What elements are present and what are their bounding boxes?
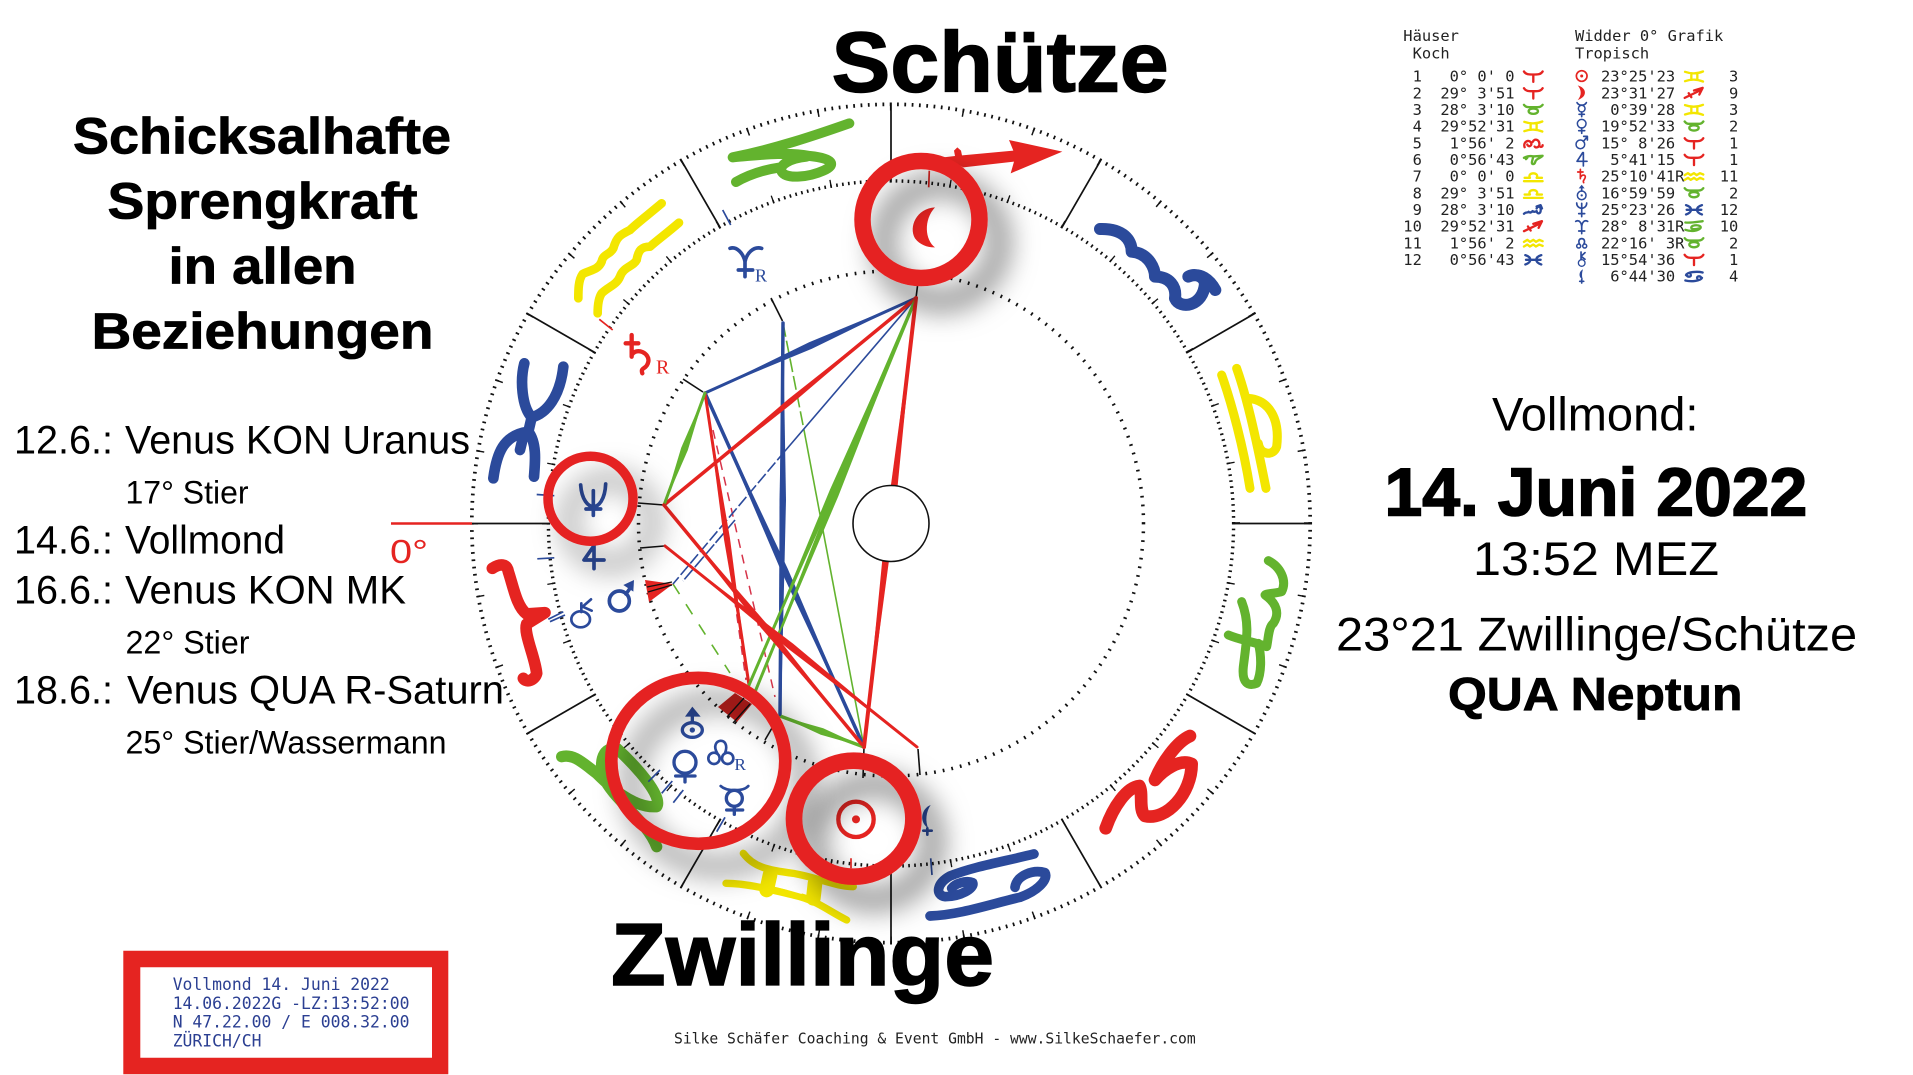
planet: venus <box>674 751 696 782</box>
heading: Zwillinge: Zwillinge <box>611 905 994 1004</box>
title block <box>73 107 451 359</box>
planet: uranus <box>682 707 702 737</box>
table: planets: 12 <box>1720 201 1738 219</box>
planet: pluto <box>730 248 767 286</box>
table: houses: 2 29° 3'51 <box>1403 84 1515 102</box>
highlight ring: moon <box>862 161 980 278</box>
table: houses: 5 1°56' 2 <box>1403 134 1515 152</box>
mars wedge <box>645 580 673 602</box>
planet: saturn <box>626 335 670 378</box>
degree scale rings <box>472 104 1310 943</box>
planet glyphs upper left <box>581 248 767 569</box>
table: houses: 6 0°56'43 <box>1403 151 1515 169</box>
transit date list: Venus QUA R-Saturn <box>127 668 504 712</box>
chart data box: 14.06.2022G -LZ:13:52:00 <box>173 994 410 1013</box>
title block: Schicksalhafte <box>73 107 451 164</box>
table: planets: 1 <box>1729 151 1738 169</box>
sagittarius arrow sign <box>943 140 1062 173</box>
zodiac: leo <box>1106 736 1192 828</box>
title block: Sprengkraft <box>108 172 418 229</box>
table: planets: 3 <box>1729 68 1738 86</box>
zodiac: capricorn <box>733 123 849 182</box>
table: planets: 2 <box>1729 184 1738 202</box>
table: planets: 1 <box>1729 251 1738 269</box>
transit date list: 25° Stier/Wassermann <box>126 724 446 760</box>
planet: saturn: R <box>656 356 670 378</box>
planet glyphs lower left <box>571 580 874 837</box>
thick aspects <box>664 298 917 747</box>
red dashed aspects <box>712 430 775 697</box>
transit date list: 22° Stier <box>126 624 250 660</box>
table: planets: 6°44'30 <box>1601 268 1675 286</box>
zero degree marker <box>390 524 472 570</box>
table: houses: 11 1°56' 2 <box>1403 234 1515 252</box>
table: planets: 22°16' 3R <box>1601 234 1685 252</box>
highlight ring: sun <box>794 761 913 877</box>
transit date list: 16.6.: <box>14 568 113 612</box>
table: houses: 7 0° 0' 0 <box>1403 168 1515 186</box>
green thin aspects <box>673 323 864 747</box>
table: planets: 23°31'27 <box>1601 84 1675 102</box>
zodiac: scorpio <box>1100 229 1215 305</box>
zodiac signs upper right <box>1100 229 1277 488</box>
planet: moon <box>913 207 935 247</box>
table: planets: 10 <box>1720 218 1738 236</box>
table: houses: Koch <box>1403 45 1450 63</box>
zodiac: gemini <box>726 853 853 920</box>
planet: jupiter <box>584 546 604 569</box>
planet: pluto: R <box>755 266 767 286</box>
transit date list: Venus KON MK <box>125 568 406 612</box>
table: planets: 5°41'15 <box>1601 151 1675 169</box>
transit date list: 17° Stier <box>126 474 249 510</box>
table: planets: 4 <box>1729 268 1738 286</box>
full moon details: 14. Juni 2022 <box>1384 455 1807 531</box>
table: planets: 19°52'33 <box>1601 118 1675 136</box>
zodiac: cancer <box>930 854 1046 916</box>
planet: mars <box>609 580 634 611</box>
planet: sun <box>838 802 874 837</box>
table: houses <box>1403 27 1543 269</box>
black connector stubs <box>638 286 920 778</box>
table: houses: 9 28° 3'10 <box>1403 201 1515 219</box>
chart data box: ZÜRICH/CH <box>173 1032 262 1051</box>
planet position ticks <box>537 171 932 875</box>
zodiac signs lower left <box>492 565 853 920</box>
table: planets: 25°10'41R <box>1601 168 1685 186</box>
table: planets: 0°39'28 <box>1601 101 1675 119</box>
zodiac: aries <box>492 565 545 681</box>
transit date list: 18.6.: <box>14 668 113 712</box>
zodiac: taurus <box>562 748 658 847</box>
highlight ring: venus group <box>611 678 785 844</box>
title block: Beziehungen <box>92 302 433 359</box>
table: planets: 15°54'36 <box>1601 251 1675 269</box>
chart data box: N 47.22.00 / E 008.32.00 <box>173 1013 410 1032</box>
highlight ring: neptune <box>548 456 633 541</box>
zodiac: aquarius <box>578 203 679 313</box>
center circle <box>853 486 929 562</box>
transit date list: Vollmond <box>125 518 285 562</box>
table: planets: 28° 8'31R <box>1601 218 1685 236</box>
astrological wheel <box>470 102 1312 944</box>
full moon details: 23°21 Zwillinge/Schütze <box>1336 608 1857 661</box>
full moon details: QUA Neptun <box>1448 668 1742 720</box>
table: houses: Häuser <box>1403 27 1459 45</box>
zodiac: virgo <box>1228 561 1284 684</box>
planet: mercury <box>721 786 748 814</box>
blue thin aspects <box>673 298 916 584</box>
footer credit: Silke Schäfer Coaching & Event GmbH - www.SilkeSchaefer.com <box>674 1030 1196 1047</box>
zero degree marker: 0° <box>390 533 428 570</box>
heading: Schütze: Schütze <box>832 16 1169 111</box>
planet: lunar node: R <box>734 755 746 774</box>
table: houses: 8 29° 3'51 <box>1403 184 1515 202</box>
planet: lunar node <box>708 741 746 774</box>
table: houses: 4 29°52'31 <box>1403 118 1515 136</box>
zodiac signs upper left <box>493 123 849 478</box>
table: planets: Tropisch <box>1575 45 1649 63</box>
table: planets: 23°25'23 <box>1601 68 1675 86</box>
title block: in allen <box>168 237 356 294</box>
table: planets: 11 <box>1720 168 1738 186</box>
zodiac: libra <box>1222 368 1277 488</box>
zodiac: pisces <box>493 363 563 478</box>
table: planets: 1 <box>1729 134 1738 152</box>
table: houses: 10 29°52'31 <box>1403 218 1515 236</box>
full moon details: Vollmond: <box>1492 388 1698 441</box>
planet: neptune <box>581 484 606 515</box>
planet: chiron <box>571 599 592 627</box>
table: planets <box>1575 27 1738 286</box>
transit date list: 14.6.: <box>14 518 113 562</box>
full moon details: 13:52 MEZ <box>1473 532 1719 585</box>
planet: lilith <box>922 805 932 835</box>
chart data table <box>1403 27 1738 286</box>
table: planets: 2 <box>1729 234 1738 252</box>
transit date list: Venus KON Uranus <box>125 418 470 462</box>
table: planets: 25°23'26 <box>1601 201 1675 219</box>
table: planets: 9 <box>1729 84 1738 102</box>
table: planets: 16°59'59 <box>1601 184 1675 202</box>
thick tapered aspect centers <box>664 298 917 747</box>
house division lines <box>470 102 1312 944</box>
uranus wedge <box>718 693 752 723</box>
transit date list <box>14 418 504 760</box>
table: planets: 15° 8'26 <box>1601 134 1675 152</box>
table: planets: 2 <box>1729 118 1738 136</box>
table: houses: 1 0° 0' 0 <box>1403 68 1515 86</box>
aspect lines <box>638 286 920 778</box>
full moon details <box>1336 388 1857 720</box>
zodiac signs lower right <box>930 561 1284 916</box>
chart data box <box>123 951 448 1074</box>
table: planets: Widder 0° Grafik <box>1575 27 1724 45</box>
transit date list: 12.6.: <box>14 418 113 462</box>
table: houses: 3 28° 3'10 <box>1403 101 1515 119</box>
table: planets: 3 <box>1729 101 1738 119</box>
chart data box: Vollmond 14. Juni 2022 <box>173 975 390 994</box>
table: houses: 12 0°56'43 <box>1403 251 1515 269</box>
